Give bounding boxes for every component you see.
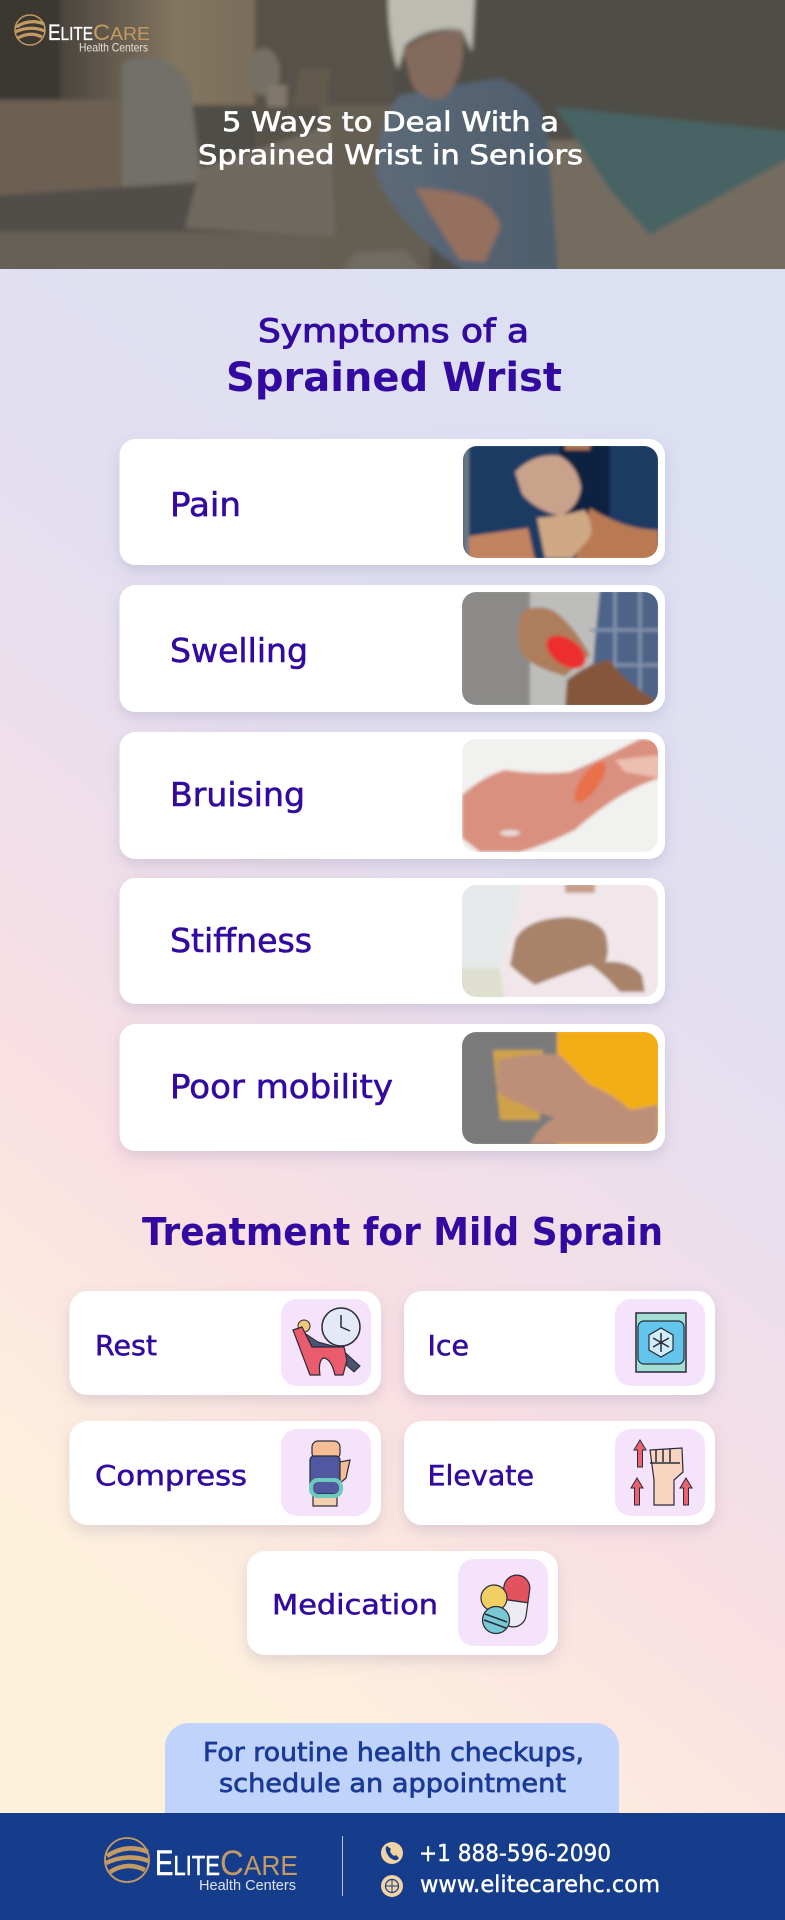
main title: [198, 107, 583, 171]
footer logo: [105, 1838, 298, 1894]
photo: stiff elderly hands: [460, 883, 660, 1000]
logo tagline: Health Centers: [79, 40, 148, 54]
icon: raised fist with arrows: [615, 1429, 705, 1516]
photo: man holding wrist: [460, 444, 660, 560]
symptom card: Pain: Pain: [170, 485, 241, 524]
call to action: For routine health checkups,: [203, 1738, 584, 1768]
treatment card: Ice: Ice: [428, 1330, 469, 1362]
main title: Sprained Wrist in Seniors: [198, 140, 583, 171]
heading: symptoms: Sprained Wrist: [226, 355, 562, 401]
treatment card: Medication: [247, 1551, 558, 1655]
heading: symptoms: [226, 312, 562, 401]
symptom card: Poor mobility: Poor mobility: [170, 1067, 393, 1106]
website: www.elitecarehc.com: [420, 1872, 660, 1898]
symptom card: Bruising: [120, 732, 665, 859]
icon: phone: [381, 1842, 403, 1864]
icon: ice pack: [615, 1299, 705, 1386]
icon: wrist compression wrap: [281, 1429, 371, 1516]
icon: person resting in chair with clock: [281, 1299, 371, 1386]
phone number: +1 888-596-2090: [419, 1841, 611, 1867]
header photo: senior woman holding her wrist: [0, 0, 785, 282]
header logo: [15, 15, 150, 54]
symptom card: Bruising: Bruising: [170, 775, 305, 814]
treatment card: Medication: Medication: [272, 1589, 438, 1621]
treatment card: Elevate: Elevate: [428, 1460, 534, 1492]
photo: swollen red wrist: [460, 590, 660, 707]
symptom card: Poor mobility: [120, 1024, 665, 1151]
main title: 5 Ways to Deal With a: [222, 107, 559, 138]
symptom card: Swelling: Swelling: [170, 631, 308, 670]
treatment card: Elevate: [404, 1421, 715, 1525]
treatment card: Compress: [70, 1421, 381, 1525]
footer divider: [342, 1836, 343, 1896]
treatment card: Compress: Compress: [95, 1460, 247, 1492]
logo emblem: [15, 15, 45, 45]
treatment card: Ice: [404, 1291, 715, 1395]
symptom card: Swelling: [120, 585, 665, 712]
photo: bruised wrist: [460, 737, 660, 854]
treatment card: Rest: [70, 1291, 381, 1395]
icon: pills and capsule: [458, 1559, 548, 1646]
call to action: [165, 1723, 619, 1813]
heading: treatment: Treatment for Mild Sprain: [142, 1210, 663, 1254]
symptom card: Stiffness: [120, 878, 665, 1004]
logo wordmark: ELITE: [48, 20, 93, 45]
header panel: [0, 0, 785, 282]
logo care wordmark: CARE: [93, 20, 150, 45]
call to action: schedule an appointment: [219, 1769, 566, 1799]
symptom card: Pain: [120, 439, 665, 565]
photo: shaking hands holding glass: [460, 1030, 662, 1146]
footer: [0, 1813, 785, 1920]
treatment card: Rest: Rest: [95, 1330, 157, 1362]
icon: globe: [381, 1875, 403, 1897]
heading: symptoms: Symptoms of a: [258, 312, 529, 350]
footer tagline: Health Centers: [199, 1877, 296, 1894]
symptom card: Stiffness: Stiffness: [170, 921, 312, 960]
footer care wordmark: CARE: [220, 1844, 298, 1883]
footer wordmark: ELITE: [155, 1844, 220, 1883]
footer logo emblem: [105, 1838, 149, 1882]
